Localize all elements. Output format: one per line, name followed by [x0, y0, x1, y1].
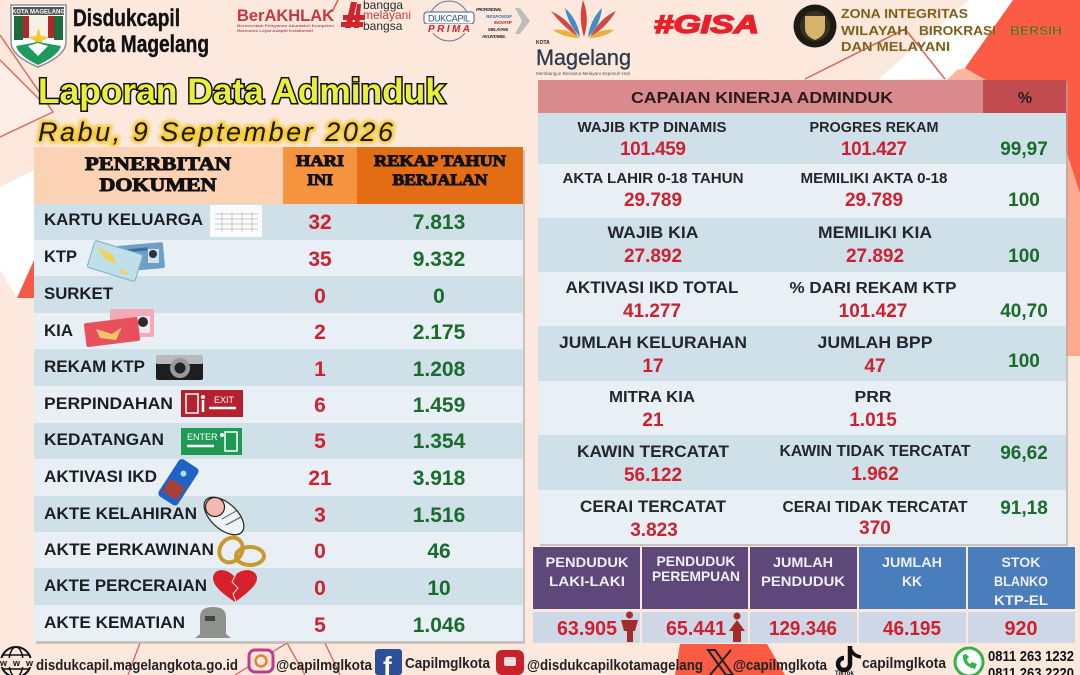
- capaian row 2: 29.789: [624, 190, 682, 211]
- capaian row 4: 101.427: [839, 301, 907, 322]
- capaian row 2: 100: [1008, 190, 1040, 211]
- row: akte kematian: 1.046: [413, 614, 465, 637]
- capaian row 6: 1.015: [849, 410, 897, 431]
- footer: website: [0, 647, 238, 675]
- capaian row 1: 101.459: [620, 139, 686, 160]
- stat: stok blanko: [994, 554, 1048, 640]
- capaian row 1: WAJIB KTP DINAMIS: [578, 119, 726, 136]
- stat: stok blanko: 920: [1004, 618, 1038, 640]
- row: akte kematian: [44, 613, 465, 637]
- logo: BerAKHLAK: Berorientasi Pelayanan Akuntabel Kompeten: [237, 24, 334, 28]
- stat: penduduk perempuan: [652, 553, 745, 642]
- capaian row 8: [580, 498, 1048, 541]
- capaian row 8: CERAI TIDAK TERCATAT: [782, 499, 968, 516]
- stat: penduduk perempuan: PENDUDUK: [656, 553, 736, 569]
- footer: tiktok: [835, 646, 947, 675]
- logo: Kota Magelang shield: [11, 5, 66, 67]
- capaian row 7: 56.122: [624, 465, 682, 486]
- logo: Dukcapil Prima: RESPONSIF: [486, 14, 512, 19]
- row: aktivasi ikd: 3.918: [413, 467, 466, 490]
- capaian row 7: KAWIN TERCATAT: [577, 442, 730, 461]
- capaian row 4: % DARI REKAM KTP: [790, 280, 957, 297]
- zona integritas text: WILAYAH: [841, 23, 908, 38]
- capaian row 2: 29.789: [845, 190, 903, 211]
- capaian row 1: 101.427: [841, 139, 907, 160]
- row: kia: 2.175: [413, 321, 466, 344]
- panel: penerbitan dokumen table: [34, 147, 525, 644]
- capaian row 3: 100: [1008, 246, 1040, 267]
- logo: #GISA: #GISA: [654, 11, 759, 39]
- row: akte perceraian: 0: [314, 577, 326, 600]
- capaian row 8: 370: [859, 518, 891, 539]
- logo: Dukcapil Prima: [424, 1, 530, 41]
- capaian row 4: AKTIVASI IKD TOTAL: [566, 278, 738, 297]
- footer: website: disdukcapil.magelangkota.go.id: [36, 658, 238, 674]
- stat: penduduk laki-laki: [546, 554, 638, 642]
- capaian row 5: 100: [1008, 351, 1040, 372]
- panel: capaian kinerja adminduk: [538, 80, 1068, 546]
- capaian row 7: 96,62: [1000, 443, 1048, 464]
- capaian row 7: [577, 442, 1048, 486]
- date: Rabu, 9 September 2026: [38, 117, 394, 147]
- row: kedatangan: [44, 430, 466, 453]
- row: akte kematian: AKTE KEMATIAN: [44, 613, 185, 632]
- logo: bangga melayani bangsa: bangsa: [363, 19, 403, 33]
- row: akte kelahiran: AKTE KELAHIRAN: [44, 504, 197, 523]
- capaian row 3: WAJIB KIA: [608, 223, 698, 242]
- zona integritas text: DAN MELAYANI: [841, 39, 950, 54]
- row: ktp: [44, 247, 465, 271]
- row: kedatangan: KEDATANGAN: [44, 430, 164, 449]
- row: ktp: 35: [308, 248, 332, 271]
- footer: instagram: @capilmglkota: [276, 658, 373, 674]
- logo: bangga melayani bangsa: [341, 0, 411, 33]
- logo: Dukcapil Prima: MELAYANI: [488, 27, 509, 32]
- stat: penduduk laki-laki: 63.905: [557, 618, 617, 640]
- row: aktivasi ikd: AKTIVASI IKD: [44, 467, 157, 486]
- capaian row 6: 21: [642, 410, 664, 431]
- row: kedatangan: 1.354: [413, 430, 466, 453]
- row: kartu keluarga: [44, 210, 465, 234]
- capaian row 4: 41.277: [623, 301, 681, 322]
- row: rekam ktp: 1.208: [413, 358, 466, 381]
- row: surket: 0: [314, 285, 326, 308]
- capaian row 4: 40,70: [1000, 301, 1048, 322]
- row: perpindahan: PERPINDAHAN: [44, 394, 173, 413]
- icon: broken heart: [213, 570, 257, 602]
- capaian row 8: 91,18: [1000, 498, 1048, 519]
- stat: jumlah penduduk: [761, 554, 845, 640]
- icon: wedding rings: [215, 533, 264, 567]
- row: akte kematian: 5: [314, 614, 326, 637]
- icon: swaddled baby: [197, 490, 251, 542]
- capaian row 3: [608, 223, 1040, 267]
- footer: tiktok: capilmglkota: [862, 656, 947, 672]
- logo: Kota Magelang shield: KOTA MAGELANG: [12, 10, 65, 16]
- icon: exit sign: [181, 390, 243, 417]
- icon: tombstone: [195, 607, 231, 638]
- zona integritas text: BERSIH: [1010, 23, 1062, 38]
- capaian row 5: 17: [642, 356, 664, 377]
- zona integritas text: ZONA INTEGRITAS: [841, 6, 968, 21]
- capaian row 1: PROGRES REKAM: [810, 119, 938, 136]
- footer: website: www: [0, 658, 34, 668]
- row: rekam ktp: REKAM KTP: [44, 357, 145, 376]
- logo: BerAKHLAK: [237, 6, 335, 33]
- capaian row 7: KAWIN TIDAK TERCATAT: [780, 443, 971, 460]
- icon: enter sign: [181, 428, 242, 455]
- capaian row 2: [562, 170, 1040, 211]
- logo text: Disdukcapil Kota Magelang: [73, 5, 209, 58]
- capaian row 3: MEMILIKI KIA: [818, 223, 932, 242]
- logo: Magelang fan: KOTA: [536, 40, 550, 46]
- capaian row 1: 99,97: [1000, 139, 1048, 160]
- row: akte perceraian: [44, 576, 451, 600]
- stat: penduduk perempuan: PEREMPUAN: [652, 568, 740, 584]
- row: aktivasi ikd: [44, 467, 466, 490]
- row: perpindahan: [44, 394, 465, 417]
- logo: bangga melayani bangsa: melayani: [363, 8, 411, 22]
- table header: HARI: [296, 153, 344, 170]
- logo: Dukcapil Prima: DUKCAPIL: [428, 14, 470, 24]
- logo: Dukcapil Prima: PRIMA: [428, 24, 470, 35]
- row: kia: 2: [314, 321, 326, 344]
- logo: BerAKHLAK: Harmonis Loyal Adaptif Kolaboratif: [237, 29, 314, 33]
- icon: family card form: [210, 205, 262, 237]
- stat: stok blanko: BLANKO: [994, 573, 1048, 589]
- stat: jumlah kk: 46.195: [883, 618, 941, 640]
- row: surket: 0: [433, 285, 445, 308]
- table header: INI: [307, 172, 333, 189]
- icon: camera: [156, 355, 203, 380]
- capaian header: %: [1018, 90, 1032, 107]
- stat: penduduk perempuan: 65.441: [666, 618, 726, 640]
- capaian header: CAPAIAN KINERJA ADMINDUK: [631, 90, 893, 107]
- capaian row 6: PRR: [854, 389, 892, 406]
- capaian row 1: [578, 119, 1048, 160]
- stat: jumlah penduduk: 129.346: [769, 618, 837, 640]
- table header: REKAP TAHUN: [374, 153, 507, 170]
- capaian row 6: MITRA KIA: [609, 389, 695, 406]
- capaian row 2: MEMILIKI AKTA 0-18: [800, 170, 948, 187]
- capaian row 5: 47: [864, 356, 886, 377]
- footer: x: @capilmglkota: [733, 658, 828, 674]
- footer: facebook: Capilmglkota: [405, 656, 491, 672]
- row: akte kelahiran: 3: [314, 504, 326, 527]
- row: kedatangan: 5: [314, 430, 326, 453]
- footer: facebook: [375, 649, 491, 675]
- footer: youtube: [496, 650, 703, 675]
- capaian row 3: 27.892: [624, 246, 682, 267]
- stat: penduduk laki-laki: PENDUDUK: [546, 554, 628, 570]
- logo: BerAKHLAK: BerAKHLAK: [237, 6, 335, 25]
- capaian row 8: 3.823: [630, 520, 678, 541]
- row: kartu keluarga: 32: [308, 211, 332, 234]
- icon: kia cards: [84, 309, 154, 347]
- row: perpindahan: 6: [314, 394, 326, 417]
- date: Rabu, 9 September 2026: [38, 117, 394, 147]
- row: surket: SURKET: [44, 284, 114, 303]
- title: Laporan Data Adminduk: [38, 72, 446, 111]
- icon: exit sign: EXIT: [214, 395, 235, 405]
- logo: Dukcapil Prima: PROFESIONAL: [476, 7, 502, 12]
- logo: Magelang fan: [536, 0, 631, 76]
- stat: jumlah penduduk: PENDUDUK: [761, 573, 845, 589]
- footer: x: [708, 650, 828, 675]
- footer: instagram: [249, 650, 373, 674]
- table header: DOKUMEN: [100, 175, 217, 196]
- footer: whatsapp: [955, 648, 1074, 675]
- capaian row 5: [559, 333, 1040, 377]
- capaian row 6: [609, 389, 897, 431]
- stat: jumlah kk: JUMLAH: [882, 554, 942, 570]
- capaian header: [538, 80, 1066, 113]
- row: ktp: 9.332: [413, 248, 465, 271]
- row: akte perceraian: AKTE PERCERAIAN: [44, 576, 207, 595]
- footer: youtube: @disdukcapilkotamagelang: [527, 658, 703, 674]
- capaian row 4: [566, 278, 1048, 322]
- row: rekam ktp: 1: [314, 358, 326, 381]
- row: akte perkawinan: AKTE PERKAWINAN: [44, 540, 214, 559]
- table header: PENERBITAN: [85, 154, 231, 175]
- row: surket: [44, 284, 445, 308]
- row: akte perkawinan: 46: [427, 540, 451, 563]
- capaian row 5: JUMLAH BPP: [818, 333, 932, 352]
- stat: stok blanko: KTP-EL: [994, 592, 1048, 608]
- icon: ktp cards: [87, 240, 165, 282]
- row: kartu keluarga: 7.813: [413, 211, 465, 234]
- panel: population summary table: [533, 547, 1075, 643]
- stat: jumlah kk: [882, 554, 942, 640]
- logo text: Disdukcapil Kota Magelang: Kota Magelang: [73, 31, 209, 58]
- row: aktivasi ikd: 21: [308, 467, 332, 490]
- capaian row 3: 27.892: [846, 246, 904, 267]
- row: ktp: KTP: [44, 247, 77, 266]
- row: kia: [44, 321, 466, 344]
- row: akte perkawinan: 0: [314, 540, 326, 563]
- row: rekam ktp: [44, 357, 466, 381]
- row: akte kelahiran: 1.516: [413, 504, 465, 527]
- stat: jumlah penduduk: JUMLAH: [773, 554, 833, 570]
- row: akte kelahiran: [44, 504, 465, 527]
- row: kia: KIA: [44, 321, 73, 340]
- logo: Dukcapil Prima: AKUNTABEL: [481, 34, 506, 39]
- row: perpindahan: 1.459: [413, 394, 465, 417]
- logo text: Disdukcapil Kota Magelang: Disdukcapil: [73, 5, 180, 32]
- row: akte perkawinan: [44, 540, 451, 563]
- stat: penduduk laki-laki: LAKI-LAKI: [549, 573, 625, 589]
- icon: enter sign: ENTER: [187, 432, 218, 442]
- stat: stok blanko: STOK: [1002, 554, 1040, 570]
- emblem: Zona Integritas seal: [794, 4, 836, 48]
- row: akte perceraian: 10: [427, 577, 451, 600]
- capaian row 8: CERAI TERCATAT: [580, 498, 726, 516]
- stat: jumlah kk: KK: [902, 573, 922, 589]
- capaian row 2: AKTA LAHIR 0-18 TAHUN: [562, 170, 744, 187]
- table header: [34, 147, 523, 204]
- row: kartu keluarga: KARTU KELUARGA: [44, 210, 203, 229]
- zona integritas text: BIROKRASI: [919, 23, 996, 38]
- logo: Magelang fan: Magelang: [536, 45, 631, 70]
- logo: Dukcapil Prima: INOVATIF: [494, 20, 512, 25]
- table header: BERJALAN: [392, 172, 488, 189]
- icon: phone ikd: [157, 458, 200, 507]
- capaian row 7: 1.962: [851, 464, 899, 485]
- logo: Magelang fan: Membangun Bersama Melayani Sepenuh Hati: [536, 71, 630, 76]
- zona integritas text: [841, 6, 1062, 54]
- capaian row 5: JUMLAH KELURAHAN: [559, 333, 747, 352]
